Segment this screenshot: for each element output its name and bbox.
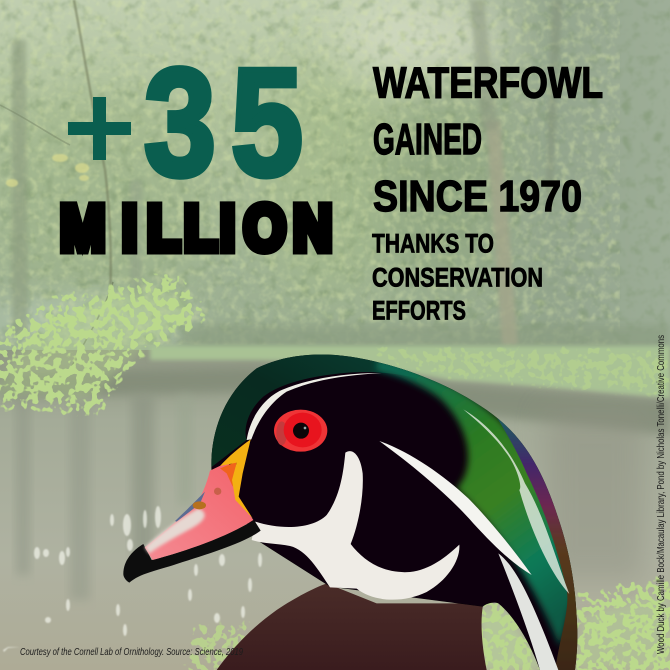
bill, lower edge and black nail [123, 520, 261, 583]
big number: +35: 3 [144, 37, 216, 208]
crest plumage [377, 360, 574, 647]
subheading: thanks to conservation efforts [372, 228, 543, 326]
duck head silhouette [211, 354, 577, 670]
overhanging leafy branch [0, 270, 210, 420]
foreground foliage at the bottom edge [180, 570, 670, 670]
big number: +35: 5 [231, 37, 303, 208]
blue bill ridge [175, 492, 205, 522]
lower white plume [498, 553, 558, 670]
bill, pink [145, 463, 253, 560]
subheading: thanks to conservation efforts: CONSERVATION [372, 262, 543, 292]
subheading: thanks to conservation efforts: THANKS TO [372, 228, 494, 258]
far bank of the pond [150, 346, 670, 398]
heading: MILLION: MILLION [60, 192, 332, 264]
headline: waterfowl gained since 1970: GAINED [373, 115, 482, 164]
photo credit, rotated: Wood Duck by Camille Bock/Macaulay Library, Pond by Nicholas Tonelli/Creative Commons [656, 335, 667, 654]
headline: waterfowl gained since 1970 [373, 58, 603, 221]
back of crest, purple and bronze [493, 412, 580, 670]
white collar and chin [252, 451, 459, 600]
pale bill tip [145, 508, 205, 553]
nostril [193, 501, 206, 509]
orange bill base [220, 462, 237, 487]
wood duck portrait [123, 353, 580, 670]
thin crest streak [463, 409, 569, 594]
duck breast [217, 583, 487, 670]
source credit: Courtesy of the Cornell Lab of Ornithology. Source: Science, 2019 [20, 647, 243, 658]
headline: waterfowl gained since 1970: WATERFOWL [373, 58, 603, 108]
subheading: thanks to conservation efforts: EFFORTS [372, 296, 466, 326]
headline: waterfowl gained since 1970: SINCE 1970 [373, 172, 582, 221]
crown plumage [211, 354, 410, 467]
long white neck stripe [379, 441, 532, 575]
upper eye stripe [247, 373, 382, 440]
eye [274, 410, 327, 452]
pond water with reflections [0, 350, 670, 670]
big number: +35 [68, 37, 303, 208]
bill spot [214, 488, 221, 495]
forest background photo [0, 0, 670, 380]
yellow bill base [220, 439, 253, 518]
duck head plumage, clipped to the head [209, 353, 580, 670]
